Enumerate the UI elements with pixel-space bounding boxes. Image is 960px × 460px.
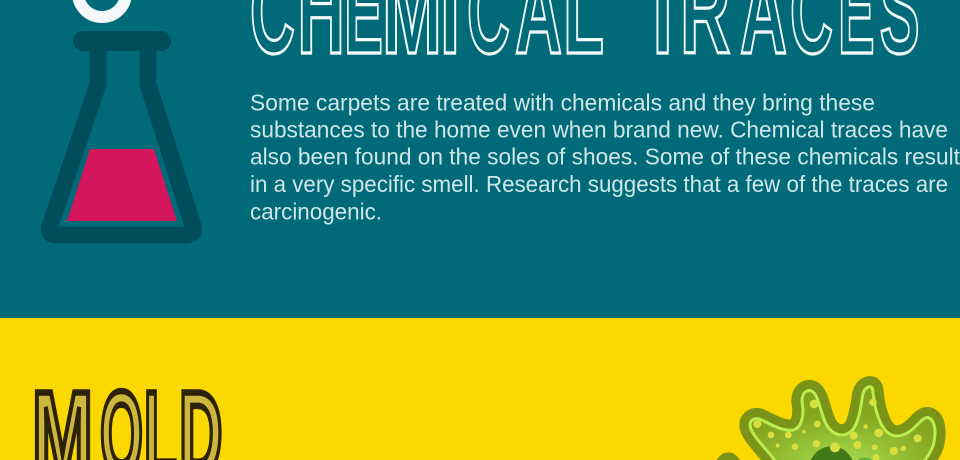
- text block: chemical traces description: [250, 90, 960, 224]
- icon: mold cell: [713, 387, 935, 460]
- heading: chemical traces: [252, 0, 918, 56]
- icon: white ring: [78, 0, 126, 17]
- panel: chemical traces: [40, 0, 960, 244]
- icon: flask: [49, 31, 194, 235]
- text block: chemical traces description: also been found on the soles of shoes. Some of these chemicals result: [250, 144, 960, 170]
- text block: chemical traces description: Some carpets are treated with chemicals and they bring these: [250, 90, 875, 116]
- text block: chemical traces description: substances to the home even when brand new. Chemical traces have: [250, 116, 948, 142]
- panel: mold: [0, 318, 960, 460]
- text block: chemical traces description: carcinogenic.: [250, 198, 382, 224]
- text block: chemical traces description: in a very specific smell. Research suggests that a few of the traces are: [250, 171, 948, 197]
- heading: mold: [34, 388, 222, 460]
